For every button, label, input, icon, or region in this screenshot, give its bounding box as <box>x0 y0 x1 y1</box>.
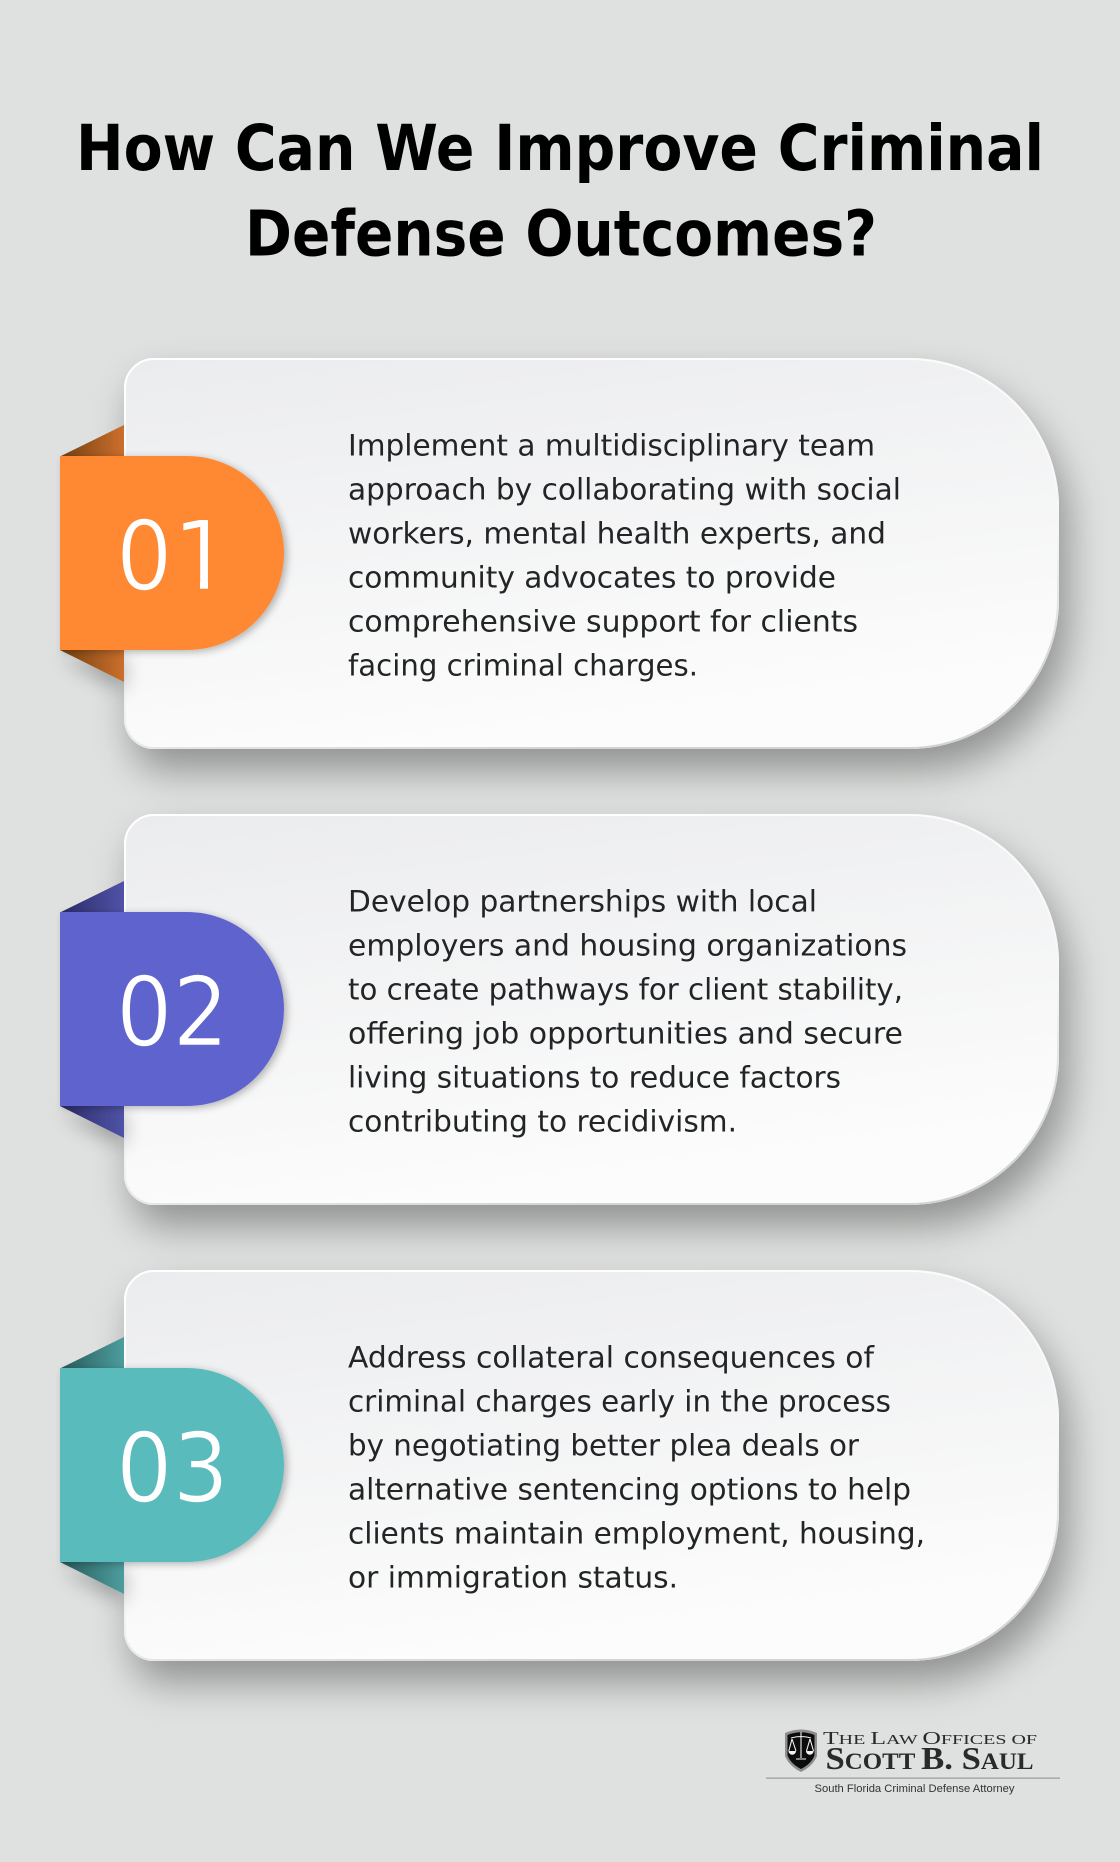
panel: step 01 <box>60 358 1059 749</box>
fold top 02 <box>61 881 124 912</box>
fold bottom 01 <box>60 650 124 682</box>
text 02: employers and housing organizations <box>348 929 907 963</box>
text 03 <box>348 1341 925 1595</box>
text 02: Develop partnerships with local <box>348 885 817 919</box>
title <box>76 112 1044 271</box>
firm name line 1: T HE L AW O FFICES OF <box>823 1728 1037 1748</box>
card edge 02 <box>125 815 1058 1204</box>
panel: step 02 <box>60 814 1059 1205</box>
card edge 01 <box>125 359 1058 748</box>
number tab 01 <box>60 456 284 650</box>
text 03: alternative sentencing options to help <box>348 1473 911 1507</box>
text 03: or immigration status. <box>348 1561 678 1595</box>
text 02 <box>348 885 907 1139</box>
number tab 02 <box>60 912 284 1106</box>
tagline: South Florida Criminal Defense Attorney <box>814 1783 1015 1795</box>
fold bottom 03 <box>60 1562 124 1594</box>
text 01: facing criminal charges. <box>348 649 698 683</box>
logo: law offices of Scott B. Saul <box>766 1728 1060 1795</box>
card background 02 <box>124 814 1059 1205</box>
firm name line 2: SCOTT B. SAUL <box>826 1740 1034 1776</box>
text 02: living situations to reduce factors <box>348 1061 841 1095</box>
fold top 03 <box>61 1337 124 1368</box>
text 03: clients maintain employment, housing, <box>348 1517 925 1551</box>
logo divider <box>766 1778 1060 1779</box>
text 02: offering job opportunities and secure <box>348 1017 903 1051</box>
text 02: to create pathways for client stability, <box>348 973 903 1007</box>
text 02: contributing to recidivism. <box>348 1105 737 1139</box>
title: How Can We Improve Criminal <box>76 112 1044 185</box>
text 03: criminal charges early in the process <box>348 1385 891 1419</box>
text 03: Address collateral consequences of <box>348 1341 875 1375</box>
card background 03 <box>124 1270 1059 1661</box>
panel: step 03 <box>60 1270 1059 1661</box>
number 01 <box>122 518 208 590</box>
title: Defense Outcomes? <box>245 198 877 271</box>
fold bottom 02 <box>60 1106 124 1138</box>
text 03: by negotiating better plea deals or <box>348 1429 860 1463</box>
fold top 01 <box>61 425 124 456</box>
text 01: community advocates to provide <box>348 561 836 595</box>
number 01: 0 <box>116 500 172 612</box>
number 01: 1 <box>172 500 233 612</box>
number tab 03 <box>60 1368 284 1562</box>
text 01: comprehensive support for clients <box>348 605 858 639</box>
text 01: workers, mental health experts, and <box>348 517 886 551</box>
text 01 <box>348 429 901 683</box>
text 01: approach by collaborating with social <box>348 473 901 507</box>
card edge 03 <box>125 1271 1058 1660</box>
card background 01 <box>124 358 1059 749</box>
number 03: 03 <box>116 1413 229 1525</box>
text 01: Implement a multidisciplinary team <box>348 429 875 463</box>
number 02: 02 <box>116 957 229 1069</box>
icon: shield with scales <box>785 1730 817 1772</box>
